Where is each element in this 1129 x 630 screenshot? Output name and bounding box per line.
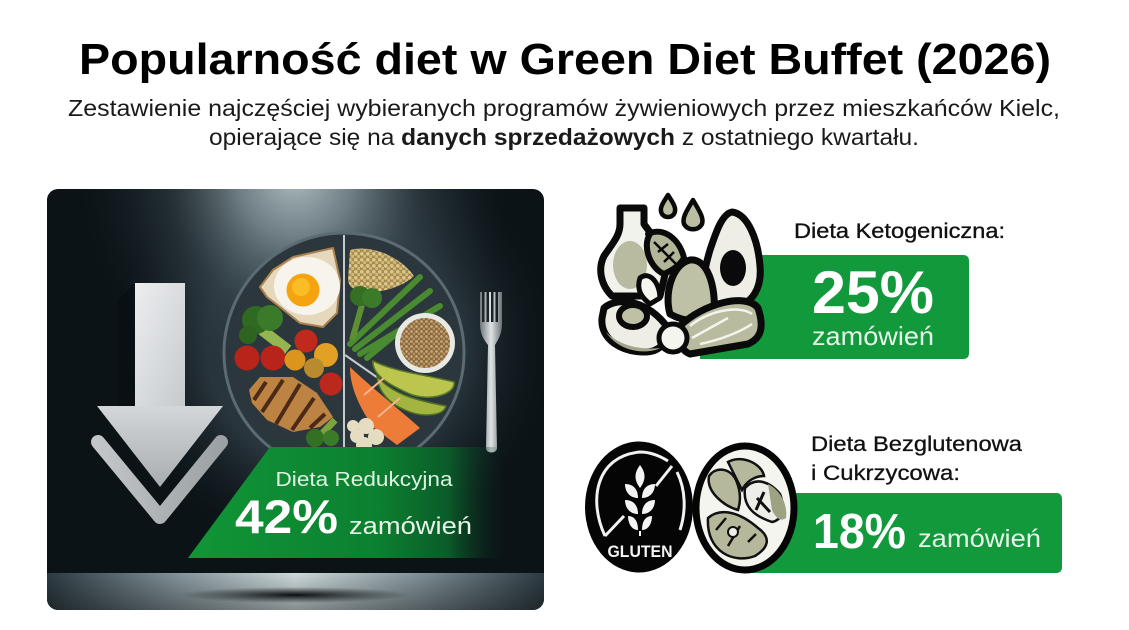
grains — [348, 248, 414, 292]
icon: plate of food — [224, 232, 464, 475]
label: Dieta Ketogeniczna: Dieta Ketogeniczna: — [794, 219, 1005, 243]
plate dividers — [343, 235, 376, 447]
asparagus — [350, 277, 440, 358]
card: Dieta Bezglutenowa 18% — [740, 493, 1062, 573]
subtitle text block: Zestawienie najczęściej wybieranych programów żywieniowych przez mieszkańców Kielc, — [68, 95, 1060, 121]
value: 42% zamówień: 42% — [235, 490, 338, 543]
salmon — [350, 367, 420, 445]
title: Popularność diet w Green Diet Buffet (2026) — [79, 36, 1051, 84]
salmon steak — [678, 301, 761, 354]
bowl of quinoa — [395, 313, 455, 373]
drops — [661, 195, 675, 217]
icon: diabetic meal plate — [696, 446, 794, 570]
card: Dieta Ketogeniczna 25% — [700, 255, 969, 359]
oil bottle — [601, 208, 668, 296]
avocado half — [703, 212, 760, 306]
wheat ear — [625, 465, 655, 536]
label: Dieta Bezglutenowa i Cukrzycowa: i Cukrzycowa: — [811, 461, 960, 485]
small broccoli right — [350, 286, 382, 340]
icon: down arrow with chevron — [97, 283, 223, 517]
egg — [668, 260, 714, 320]
icon: keto foods — [601, 195, 761, 354]
subtitle text block — [68, 95, 1060, 150]
avocado slices — [373, 361, 454, 415]
callout: green banner — [188, 447, 505, 558]
cauliflower — [347, 418, 384, 447]
grilled chicken — [249, 377, 333, 432]
card: Dieta Ketogeniczna 25%: 25% — [812, 259, 934, 326]
egg on toast — [260, 248, 340, 327]
value: 42% zamówień: zamówień — [349, 513, 472, 540]
panel: Dieta Redukcyjna — [47, 189, 544, 610]
broccoli left — [239, 305, 288, 350]
small egg — [659, 324, 687, 352]
icon: no gluten — [585, 442, 693, 572]
label: Dieta Redukcyjna: Dieta Redukcyjna — [276, 469, 453, 491]
icon: no gluten: GLUTEN — [608, 542, 672, 561]
label: Dieta Bezglutenowa i Cukrzycowa: Dieta Bezglutenowa — [811, 432, 1022, 456]
card: Dieta Bezglutenowa 18%: 18% — [813, 505, 906, 559]
icon: fork — [480, 292, 502, 452]
leaf — [647, 232, 684, 274]
avocado half, lower — [602, 302, 668, 352]
card: Dieta Bezglutenowa 18%: zamówień — [918, 525, 1041, 553]
card: Dieta Ketogeniczna 25%: zamówień — [812, 321, 934, 351]
subtitle text block: opierające się na danych sprzedażowych z ostatniego kwartału. — [209, 124, 919, 150]
tomatoes — [234, 330, 342, 396]
small egg piece — [639, 276, 660, 304]
bottom reflective band — [47, 573, 544, 610]
broccoli bottom — [306, 420, 339, 447]
label: Dieta Bezglutenowa i Cukrzycowa — [811, 432, 1022, 485]
value: 42% zamówień — [236, 500, 470, 534]
